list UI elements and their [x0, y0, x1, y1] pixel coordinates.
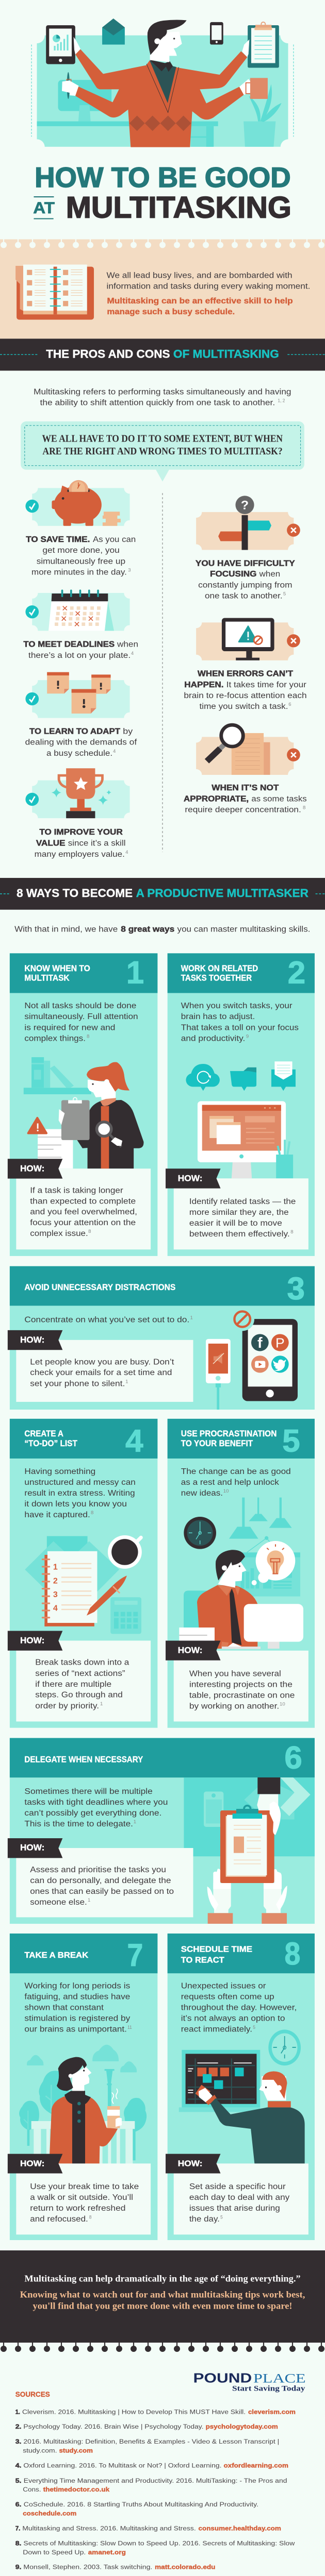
tip text: 9: [246, 1034, 249, 1039]
con text: APPROPRIATE,: [184, 794, 249, 803]
number 8: 8: [285, 1936, 300, 1971]
tip header and text: [10, 1738, 315, 1924]
sources list: 2.: [15, 2424, 21, 2430]
how box: 1: [88, 1897, 90, 1903]
tip heading: “TO-DO” LIST: [24, 1439, 77, 1448]
tip text: 1: [190, 1315, 193, 1320]
text block: 8 great ways intro: you can master multitasking skills.: [177, 925, 310, 934]
con text: require deeper concentration.: [185, 805, 301, 814]
heading: 8 ways to become a productive multitasker: 8 WAYS TO BECOME: [17, 887, 133, 900]
how box: return to work refreshed: [30, 2204, 125, 2213]
illustration: woman with coffee in park: [19, 2045, 147, 2164]
tip header: 10: [223, 1488, 229, 1494]
icon: trophy: [25, 768, 130, 818]
hands holding items: [62, 37, 268, 99]
how box: the day.: [189, 2215, 220, 2224]
tip heading: CREATE A: [24, 1429, 63, 1438]
pro text: 4: [131, 651, 134, 656]
pro text: a busy schedule.: [46, 749, 112, 758]
tip header: as a rest and help unlock: [181, 1478, 279, 1487]
tip text: it’s not always an option to: [181, 2014, 285, 2023]
tip text: 5: [253, 2025, 255, 2030]
sources list: Cleverism. 2016. Multitasking | How to Develop This MUST Have Skill.: [22, 2409, 246, 2416]
tip text: [181, 1002, 299, 1043]
how box: [8, 1838, 193, 1917]
how box: Break tasks down into a: [35, 1658, 129, 1667]
how box: than expected to complete: [30, 1197, 136, 1206]
how box: each day to deal with any: [189, 2193, 290, 2202]
heading: the pros and cons of multitasking: OF MULTITASKING: [173, 348, 279, 361]
text block: 8 great ways intro: With that in mind, we have: [14, 925, 118, 934]
illustration: man with idea at desk: [179, 1498, 303, 1649]
pro text: TO LEARN TO ADAPT: [29, 727, 120, 736]
tip heading: [24, 1429, 77, 1448]
tip header and text: shown that constant: [24, 2004, 104, 2012]
panel: conclusion: you'll find that you get more done with even more time to spare!: [33, 2300, 292, 2311]
pro: to meet deadlines: [23, 590, 138, 660]
illustration: notebook, coffee, pen: [25, 1535, 142, 1634]
how box: table, procrastinate on one: [189, 1691, 295, 1700]
con text: 8: [303, 805, 305, 810]
sources list: Down to Speed Up.: [23, 2549, 86, 2556]
how box: if there are multiple: [35, 1680, 111, 1689]
sources heading: SOURCES: [15, 2390, 50, 2398]
tip heading: AVOID UNNECESSARY DISTRACTIONS: [24, 1283, 175, 1292]
tip header and text: our brains as unimportant.: [24, 2025, 127, 2034]
sources list: [15, 2390, 296, 2576]
how box: Identify related tasks — the: [189, 1197, 296, 1206]
tip header: new ideas.: [181, 1489, 223, 1498]
pro text: by: [123, 727, 133, 736]
sources list: study.com.: [23, 2448, 57, 2454]
tip text: 8: [87, 1034, 89, 1039]
man sweater and arms: [75, 49, 247, 147]
illustration: muted phone: [206, 1339, 231, 1410]
tip header and text: DELEGATE WHEN NECESSARY: [24, 1755, 143, 1764]
how box: check your emails for a set time and: [30, 1368, 172, 1377]
con text: It takes time for your: [226, 681, 307, 689]
sources list: Psychology Today. 2016. Brain Wise | Psychology Today.: [23, 2424, 204, 2430]
how box: 1: [100, 1701, 103, 1707]
how box: issues that arise during: [189, 2204, 280, 2213]
title: [33, 162, 291, 225]
tip text: result in extra stress. Writing: [24, 1489, 135, 1498]
tip text: have it captured.: [24, 1511, 90, 1519]
how box: HOW:: [20, 1164, 44, 1173]
tip header and text: stimulation is registered by: [24, 2014, 131, 2023]
how box: [166, 1640, 308, 1721]
text block: multitasking definition: 1, 2: [278, 398, 285, 404]
pro text: more minutes in the day.: [31, 568, 127, 577]
pro text: TO IMPROVE YOUR: [39, 828, 123, 837]
pro: to learn to adapt: [25, 672, 137, 758]
pro text: [23, 640, 138, 660]
heading: 8 ways to become a productive multitasker: A PRODUCTIVE MULTITASKER: [136, 887, 308, 900]
tip header and text: This is the time to delegate.: [24, 1820, 133, 1828]
tip text: [24, 1002, 138, 1043]
icon: signpost: [196, 496, 300, 550]
sources list: thetimedoctor.co.uk: [43, 2487, 110, 2493]
con text: [184, 670, 307, 711]
how box: When you have several: [189, 1670, 281, 1679]
illustration: tablet with social apps: [230, 1308, 298, 1401]
how box: HOW:: [20, 1335, 44, 1345]
how box: set your phone to silent.: [30, 1380, 125, 1388]
how box: Use your break time to take: [30, 2182, 139, 2191]
pro text: there’s a lot on your plate.: [28, 651, 131, 660]
how box: [8, 1159, 151, 1249]
tip header and text: can’t possibly get everything done.: [24, 1809, 161, 1818]
tip heading: WORK ON RELATED: [181, 964, 258, 973]
icon: magnifier over document: [196, 725, 300, 775]
tip header and text: tasks with tight deadlines where you: [24, 1798, 168, 1807]
sources list: Multitasking and Stress. 2016. Multitasking and Stress.: [22, 2526, 196, 2532]
heading: 8 ways to become a productive multitasker: [0, 878, 325, 910]
tip header: USE PROCRASTINATION: [181, 1429, 277, 1438]
how box: If a task is taking longer: [30, 1186, 123, 1195]
illustration: desktop computer: [198, 1101, 293, 1178]
con: when it's not appropriate: [184, 725, 307, 814]
tip text: brain has to adjust.: [181, 1012, 255, 1021]
how box: Assess and prioritise the tasks you: [30, 1866, 166, 1874]
panel: tip 2 work on related tasks together: [166, 953, 315, 1256]
tip header: 5: [282, 1423, 300, 1459]
how box: and you feel overwhelmed,: [30, 1208, 137, 1216]
how box: [8, 1631, 151, 1721]
pro text: TO SAVE TIME.: [26, 535, 90, 544]
how box: HOW:: [20, 1636, 44, 1646]
logo: poundplace: POUND: [193, 2371, 252, 2386]
how box: 5: [220, 2214, 223, 2220]
panel: conclusion: Knowing what to watch out for and what multitasking tips work best,: [20, 2289, 305, 2299]
tip text: complex things.: [24, 1034, 86, 1043]
how box: 8: [88, 1229, 91, 1234]
sources list: Everything Time Management and Productivity. 2016. MultiTasking: - The Pros and: [24, 2478, 287, 2484]
background desk and monitor: [37, 80, 282, 147]
panel: tip 8 schedule time to react: [166, 1934, 315, 2240]
panel: conclusion: [0, 2250, 325, 2349]
tip heading: MULTITASK: [24, 974, 70, 983]
how box: Set aside a specific hour: [189, 2182, 286, 2191]
pro text: get more done, you: [42, 546, 120, 555]
tip heading: [181, 964, 258, 983]
number 2: 2: [288, 955, 305, 990]
sources list: consumer.healthday.com: [199, 2526, 281, 2532]
pro text: simultaneously free up: [37, 557, 125, 566]
how box: between them effectively.: [189, 1230, 290, 1239]
tip text: [181, 1982, 297, 2034]
title: HOW TO BE GOOD: [35, 162, 291, 193]
how box: HOW:: [178, 1646, 203, 1655]
tip heading: SCHEDULE TIME: [181, 1945, 252, 1954]
how box: Let people know you are busy. Don’t: [30, 1358, 174, 1366]
icon: signpost: ?: [241, 499, 249, 513]
icon: calendar: [25, 590, 130, 631]
intro text: We all lead busy lives, and are bombarded with: [107, 272, 293, 280]
how box: by working on another.: [189, 1702, 279, 1710]
how box: [166, 2154, 308, 2234]
sources list: cleverism.com: [248, 2409, 296, 2416]
pro text: since it’s a skill: [68, 839, 125, 848]
illustration: tablet with social apps: f: [257, 1335, 263, 1351]
tip text: and productivity.: [181, 1034, 245, 1043]
panel: tip 4 create a to-do list: [8, 1419, 157, 1728]
sources list: Monsell, Stephen. 2003. Task switching.: [23, 2564, 152, 2571]
how box: steps. Go through and: [35, 1691, 123, 1700]
how box: 8: [290, 1229, 294, 1235]
panel: tip 5 use procrastination to your benefit: [166, 1419, 315, 1728]
tip header and text: 7: [127, 1938, 143, 1973]
tip text: unstructured and messy can: [24, 1478, 136, 1487]
tip text: Not all tasks should be done: [24, 1002, 137, 1010]
sources list: study.com: [59, 2448, 93, 2454]
intro text: manage such a busy schedule.: [107, 308, 235, 316]
tip header and text: 1: [134, 1819, 136, 1825]
pro text: when: [117, 640, 138, 649]
sources list: 4.: [15, 2463, 21, 2469]
sources list: matt.colorado.edu: [155, 2564, 215, 2571]
illustration: notebook, coffee, pen: 2: [53, 1577, 58, 1585]
tip text: simultaneously. Full attention: [24, 1012, 138, 1021]
illustration: notebook, coffee, pen: 3: [53, 1590, 58, 1599]
tip heading: KNOW WHEN TO: [24, 964, 90, 973]
sources list: 9.: [15, 2564, 21, 2571]
tip text: 8: [91, 1510, 93, 1516]
logo: poundplace: Start Saving Today: [232, 2384, 305, 2393]
pro text: TO MEET DEADLINES: [23, 640, 115, 649]
logo: poundplace: [193, 2371, 306, 2393]
icon: sticky notes: [25, 672, 130, 718]
pro text: dealing with the demands of: [25, 738, 137, 747]
tablet: [46, 25, 75, 64]
icon: monitor with warning: [196, 618, 300, 660]
how box: HOW:: [20, 2159, 44, 2168]
logo: poundplace: PLACE: [253, 2371, 306, 2386]
phone: [210, 22, 223, 45]
callout: right and wrong times: ARE THE RIGHT AND WRONG TIMES TO MULTITASK?: [42, 446, 283, 457]
title: AT: [33, 198, 55, 217]
tip header and text: fatiguing, and studies have: [24, 1993, 130, 2002]
man figure: [62, 20, 268, 147]
con text: WHEN IT’S NOT: [212, 784, 279, 792]
tip header and text: Sometimes there will be multiple: [24, 1787, 153, 1796]
icon: open planner book: [15, 265, 94, 319]
how box: order by priority.: [35, 1702, 99, 1710]
callout: right and wrong times: [21, 421, 304, 482]
intro text: information and tasks during every waking moment.: [107, 282, 310, 291]
sources list: oxfordlearning.com: [224, 2463, 288, 2469]
sources list: Cons.: [23, 2487, 41, 2493]
how box: a walk or sit outside. You’ll: [30, 2193, 133, 2202]
text block: multitasking definition: the ability to shift attention quickly from one task to another.: [40, 399, 275, 408]
pro text: [26, 535, 136, 577]
pro text: many employers value.: [35, 850, 125, 859]
tip header and text: [10, 1934, 157, 2240]
tip heading: [181, 1945, 252, 1965]
sources list: 7.: [15, 2526, 20, 2532]
tip header: The change can be as good: [181, 1467, 291, 1476]
pro text: VALUE: [36, 839, 66, 848]
sources list: Oxford Learning. 2016. To Multitask or Not? | Oxford Learning.: [23, 2463, 222, 2469]
number 1: 1: [126, 955, 144, 990]
pro: to improve your value: [25, 768, 130, 859]
illustration: handing over clipboard: [204, 1777, 311, 1924]
panel: tip 1 know when to multitask: [8, 953, 157, 1256]
clipboard: [248, 22, 279, 67]
panel: conclusion: Multitasking can help dramatically in the age of “doing everything.”: [24, 2273, 301, 2283]
tip text: That takes a toll on your focus: [181, 1024, 299, 1032]
con text: as some tasks: [251, 794, 307, 803]
sources list: Secrets of Multitasking: Slow Down to Speed Up. 2016. Secrets of Multitasking: Slow: [23, 2540, 295, 2547]
tip text: throughout the day. However,: [181, 2004, 297, 2012]
con text: time you switch a task.: [200, 702, 288, 711]
con text: brain to re-focus attention each: [184, 691, 307, 700]
sources list: 1.: [15, 2409, 20, 2416]
how box: ones that can easily be passed on to: [30, 1887, 174, 1896]
con text: FOCUSING: [210, 570, 256, 579]
tip header and text: 11: [127, 2025, 132, 2030]
con text: constantly jumping from: [198, 581, 293, 590]
tip text: it down lets you know you: [24, 1500, 127, 1509]
tip header: TO YOUR BENEFIT: [181, 1439, 253, 1448]
text block: multitasking definition: [34, 388, 291, 408]
icon: piggy bank: [25, 480, 130, 526]
con text: 6: [288, 702, 291, 707]
sources list: 5.: [15, 2478, 21, 2484]
intro text: Multitasking can be an effective skill to help: [107, 297, 293, 306]
text block: 8 great ways intro: 8 great ways: [121, 925, 174, 934]
sources list: psychologytoday.com: [206, 2424, 278, 2430]
pro text: [25, 727, 137, 758]
title: MULTITASKING: [66, 191, 291, 225]
how box: complex issue.: [30, 1229, 88, 1238]
pro: to save time: [25, 480, 136, 577]
how box: focus your attention on the: [30, 1218, 136, 1227]
callout: right and wrong times: WE ALL HAVE TO DO IT TO SOME EXTENT, BUT WHEN: [42, 433, 283, 444]
how box: and refocused.: [30, 2215, 88, 2224]
tip text: requests often come up: [181, 1993, 274, 2002]
how box: HOW:: [20, 1843, 44, 1853]
con text: HAPPEN.: [184, 681, 224, 689]
tip text: When you switch tasks, your: [181, 1002, 293, 1010]
how box: 10: [280, 1702, 285, 1707]
how box: someone else.: [30, 1898, 87, 1907]
con text: WHEN ERRORS CAN’T: [198, 670, 293, 679]
illustration: man at schedule board: [179, 2030, 305, 2164]
hero illustration: multitasking man: [31, 19, 294, 147]
how box: 1: [125, 1379, 128, 1385]
how box: HOW:: [178, 1174, 203, 1183]
tip heading: [24, 964, 90, 983]
number 3: 3: [287, 1271, 305, 1307]
how box: HOW:: [178, 2159, 203, 2168]
tip header and text: Working for long periods is: [24, 1982, 130, 1991]
tip text: [24, 1467, 136, 1519]
pro text: 4: [125, 850, 128, 855]
pro text: As you can: [93, 535, 136, 544]
con text: [196, 559, 295, 601]
how box: easier it will be to move: [189, 1219, 282, 1228]
pro text: 4: [113, 749, 116, 754]
sources list: 2016. Multitasking: Definition, Benefits & Examples - Video & Lesson Transcript |: [23, 2439, 279, 2445]
con text: YOU HAVE DIFFICULTY: [196, 559, 295, 568]
man head: [148, 20, 187, 62]
heading: the pros and cons of multitasking: THE PROS AND CONS: [46, 348, 170, 361]
sources list: 3.: [15, 2439, 21, 2445]
panel: tip 3 avoid unnecessary distractions: [8, 1266, 315, 1410]
how box: interesting projects on the: [189, 1681, 293, 1689]
heading: the pros and cons of multitasking: [0, 338, 325, 370]
how box: 8: [89, 2214, 92, 2220]
tip text: Concentrate on what you’ve set out to do.: [24, 1316, 189, 1324]
how box: [166, 1168, 308, 1249]
intro text: [107, 272, 310, 316]
sources list: 8.: [15, 2540, 21, 2547]
number 4: 4: [125, 1423, 143, 1459]
tip text: react immediately.: [181, 2025, 252, 2034]
panel: tip 6 delegate when necessary: [8, 1738, 315, 1924]
con text: [184, 784, 307, 814]
icons: cloud, folder, mail: [186, 1061, 296, 1091]
text block: multitasking definition: Multitasking refers to performing tasks simultaneously and having: [34, 388, 291, 397]
how box: series of “next actions”: [35, 1669, 125, 1678]
illustration: tablet with social apps: P: [275, 1335, 285, 1350]
con text: when: [259, 570, 280, 579]
tip heading: TASKS TOGETHER: [181, 974, 252, 983]
sources list: CoSchedule. 2016. 8 Startling Truths About Multitasking And Productivity.: [24, 2502, 258, 2508]
how box: can do personally, and delegate the: [30, 1876, 171, 1885]
tip heading: TO REACT: [181, 1956, 224, 1965]
con: difficulty focusing: [196, 496, 300, 601]
pro text: 3: [128, 567, 131, 573]
illustration: notebook, coffee, pen: 4: [53, 1604, 58, 1613]
how box: more similar they are, the: [189, 1208, 289, 1217]
panel: intro band: [0, 239, 325, 338]
how box: [8, 1330, 193, 1402]
tip text: is required for new and: [24, 1024, 115, 1032]
tip header and text: TAKE A BREAK: [24, 1951, 88, 1960]
sources list: coschedule.com: [23, 2511, 76, 2517]
how box: [8, 2154, 151, 2234]
illustration: notebook, coffee, pen: 1: [53, 1563, 58, 1571]
con: when errors can't happen: [184, 618, 307, 711]
tip text: Unexpected issues or: [181, 1982, 266, 1991]
illustration: woman with clipboard: [24, 1057, 144, 1168]
tip text: Having something: [24, 1467, 95, 1476]
pro text: [35, 828, 128, 859]
sources list: amanet.org: [88, 2549, 126, 2556]
panel: tip 7 take a break: [8, 1934, 157, 2240]
sources list: 6.: [15, 2502, 21, 2508]
con text: one task to another.: [205, 592, 283, 601]
tip header: [168, 1419, 315, 1498]
text block: 8 great ways intro: [14, 925, 310, 934]
con text: 5: [283, 591, 286, 597]
tip header and text: 6: [284, 1740, 302, 1775]
envelope: [102, 19, 125, 45]
